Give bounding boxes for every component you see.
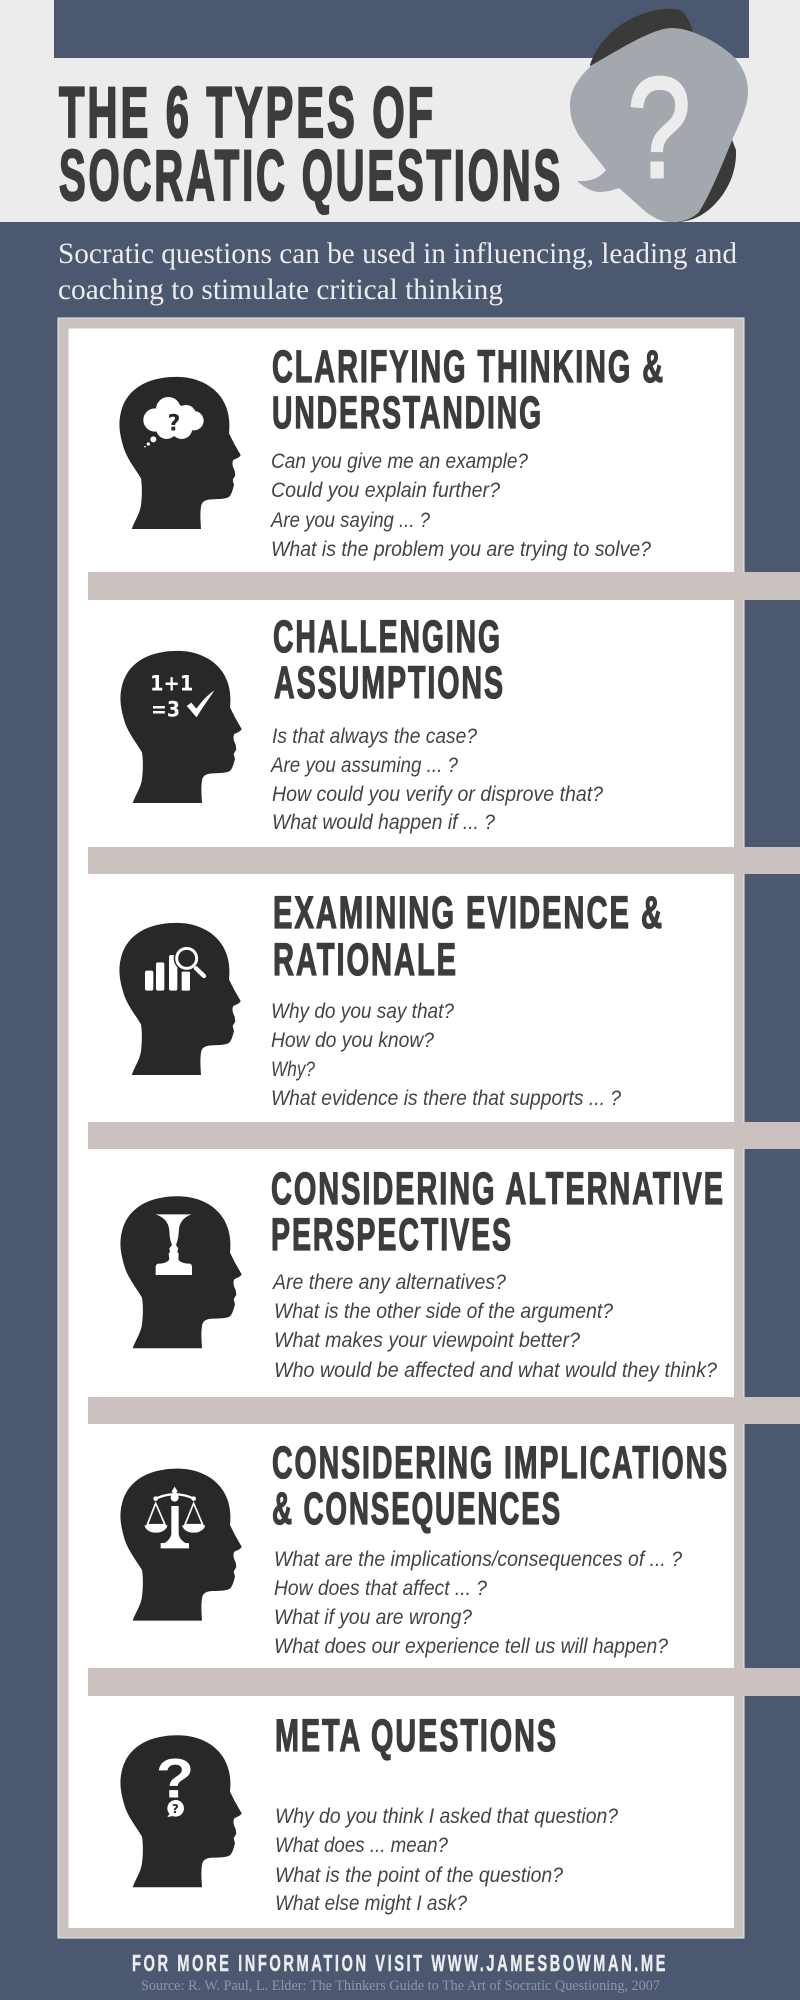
questions: How does that affect ... ? [274, 1577, 487, 1600]
questions: What evidence is there that supports ... ? [271, 1087, 621, 1110]
panel: considering alternative perspectives [68, 1149, 734, 1397]
questions: Could you explain further? [271, 479, 500, 502]
questions [271, 1271, 717, 1382]
questions: Why do you think I asked that question? [275, 1805, 618, 1828]
heading: PERSPECTIVES [271, 1209, 513, 1260]
heading: & CONSEQUENCES [272, 1483, 562, 1534]
icon: head with thought cloud: ? [168, 411, 180, 436]
intro text: Socratic questions can be used in influencing, leading and [58, 237, 737, 270]
source line: Source: R. W. Paul, L. Elder: The Thinkers Guide to The Art of Socratic Questioning, 2007 [141, 1978, 660, 1994]
questions [271, 1000, 621, 1110]
icon: head with faces and vase illusion [120, 1196, 242, 1348]
heading [272, 341, 665, 438]
questions: Are there any alternatives? [271, 1271, 506, 1294]
questions [269, 725, 603, 834]
heading: UNDERSTANDING [272, 387, 543, 438]
heading [271, 1163, 725, 1260]
divider bar 3 [88, 1122, 800, 1149]
panel: examining evidence and rationale [68, 874, 734, 1122]
icon: head with equation and check mark: =3 [151, 698, 180, 723]
questions: What are the implications/consequences of ... ? [274, 1548, 682, 1571]
questions: What makes your viewpoint better? [274, 1329, 580, 1352]
questions [274, 1548, 682, 1658]
divider bar 1 [88, 572, 800, 600]
questions: Why do you say that? [271, 1000, 454, 1023]
panel: considering implications and consequences [68, 1424, 734, 1668]
divider bar 5 [88, 1668, 800, 1696]
panel: challenging assumptions [68, 600, 734, 847]
heading: RATIONALE [273, 934, 458, 985]
questions: What else might I ask? [275, 1892, 467, 1915]
icon: head with bar chart and magnifier [119, 923, 241, 1075]
questions: Is that always the case? [272, 725, 477, 748]
divider bar 2 [88, 847, 800, 874]
questions: What is the other side of the argument? [274, 1300, 613, 1323]
heading: META QUESTIONS [275, 1710, 558, 1761]
icon: head with thought cloud [119, 377, 241, 529]
icon: head with question mark [120, 1735, 242, 1887]
icon: question speech bubble [570, 9, 748, 222]
questions: Can you give me an example? [271, 450, 528, 473]
questions: What would happen if ... ? [272, 811, 495, 834]
heading [273, 611, 505, 708]
heading [273, 887, 664, 985]
questions: Why? [271, 1058, 315, 1081]
questions: What is the point of the question? [275, 1864, 563, 1887]
divider bar 4 [88, 1397, 800, 1424]
intro text: coaching to stimulate critical thinking [58, 273, 503, 306]
questions: What does our experience tell us will happen? [274, 1635, 668, 1658]
questions: Are you saying ... ? [269, 509, 430, 532]
questions: What is the problem you are trying to solve? [271, 538, 651, 561]
questions: How could you verify or disprove that? [272, 783, 603, 806]
icon: head with equation and check mark: 1+1 [150, 672, 193, 697]
icon: question speech bubble: ? [627, 49, 691, 208]
panel: meta questions [68, 1696, 734, 1928]
questions: Who would be affected and what would they think? [274, 1359, 717, 1382]
content frame [58, 318, 744, 1938]
icon: head with scales of justice [120, 1469, 242, 1621]
header band [0, 0, 800, 222]
heading: ASSUMPTIONS [274, 657, 505, 708]
icon: head with question mark: ? [156, 1746, 194, 1810]
questions: What does ... mean? [275, 1834, 448, 1857]
heading: CHALLENGING [273, 611, 502, 662]
icon: head with equation and check mark [120, 651, 242, 803]
questions: Are you assuming ... ? [269, 754, 458, 777]
title: THE 6 TYPES OF [59, 74, 436, 153]
questions [275, 1805, 618, 1915]
heading [272, 1437, 729, 1534]
icon: head with question mark: ? [172, 1802, 179, 1816]
panel: clarifying thinking and understanding [68, 328, 734, 572]
intro text [58, 237, 737, 306]
questions: How do you know? [271, 1029, 434, 1052]
title [59, 74, 563, 216]
questions: What if you are wrong? [274, 1606, 472, 1629]
questions [269, 450, 651, 561]
